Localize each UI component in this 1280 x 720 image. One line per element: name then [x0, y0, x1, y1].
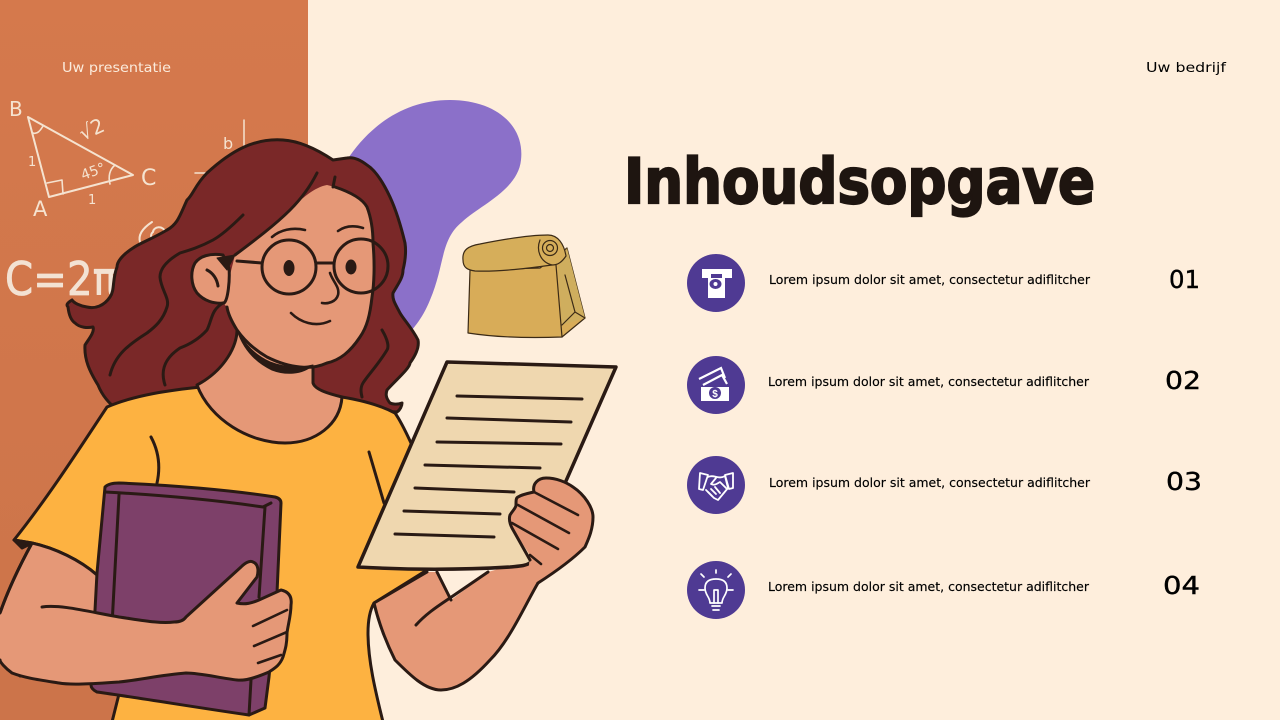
icon: handshake — [687, 456, 745, 514]
neck — [197, 327, 342, 443]
chalk math drawing: 1 — [88, 193, 96, 208]
left body edge — [0, 543, 32, 613]
paper — [358, 362, 616, 569]
shirt — [14, 387, 427, 720]
elbow crease — [416, 572, 488, 625]
item text: Lorem ipsum dolor sit amet, consectetur adiflitcher — [768, 375, 1089, 389]
illustration: woman holding book and paper — [0, 140, 616, 720]
chalk math drawing: C — [141, 166, 156, 191]
chalk math drawing: 1 — [28, 155, 36, 170]
ear — [192, 254, 229, 303]
item 4 — [687, 561, 1200, 619]
item number: 02 — [1165, 366, 1201, 395]
chalk math drawing: √2 — [75, 113, 108, 146]
icon: banknotes: $ — [712, 389, 718, 400]
icon: cash machine — [687, 254, 745, 312]
right hand — [509, 478, 593, 583]
right arm — [374, 560, 538, 690]
item number: 04 — [1163, 571, 1200, 600]
hair — [67, 140, 418, 412]
item text: Lorem ipsum dolor sit amet, consectetur adiflitcher — [768, 580, 1089, 594]
icon: light bulb — [687, 561, 745, 619]
glasses — [237, 239, 388, 294]
left forearm and hand — [0, 561, 291, 684]
chalk math drawing: C=2π — [5, 252, 117, 306]
item 1 — [687, 254, 1200, 312]
book — [91, 483, 281, 715]
hair strands — [110, 177, 388, 397]
chalk math drawing: 45° — [79, 160, 108, 184]
chalk math drawing — [5, 97, 244, 306]
ear fold — [207, 270, 218, 286]
eyes — [284, 260, 356, 276]
finger lines — [253, 610, 287, 663]
purple blob — [347, 100, 521, 340]
chalk math drawing: A — [33, 197, 48, 221]
item number: 03 — [1166, 467, 1202, 496]
title: Inhoudsopgave — [624, 145, 1095, 218]
item text: Lorem ipsum dolor sit amet, consectetur adiflitcher — [769, 476, 1090, 490]
ear shadow — [217, 255, 235, 270]
item 3 — [687, 456, 1202, 514]
icon: paper bag — [463, 235, 585, 338]
brows, nose and mouth — [272, 226, 363, 324]
face outline — [227, 173, 374, 367]
item number: 01 — [1169, 265, 1200, 294]
item 2 — [687, 356, 1201, 414]
chin shadow — [237, 330, 313, 373]
chalk math drawing: b — [223, 134, 233, 153]
item text: Lorem ipsum dolor sit amet, consectetur adiflitcher — [769, 273, 1090, 287]
face — [223, 185, 374, 367]
upper left arm — [0, 543, 110, 676]
header: presentation label: Uw presentatie — [62, 61, 171, 76]
header: company label: Uw bedrijf — [1146, 61, 1227, 76]
shirt fold lines — [151, 437, 384, 503]
sleeve shadow — [14, 540, 32, 548]
chalk math drawing: B — [9, 97, 23, 121]
panel: left orange chalkboard — [0, 0, 308, 720]
icon: banknotes — [687, 356, 745, 414]
